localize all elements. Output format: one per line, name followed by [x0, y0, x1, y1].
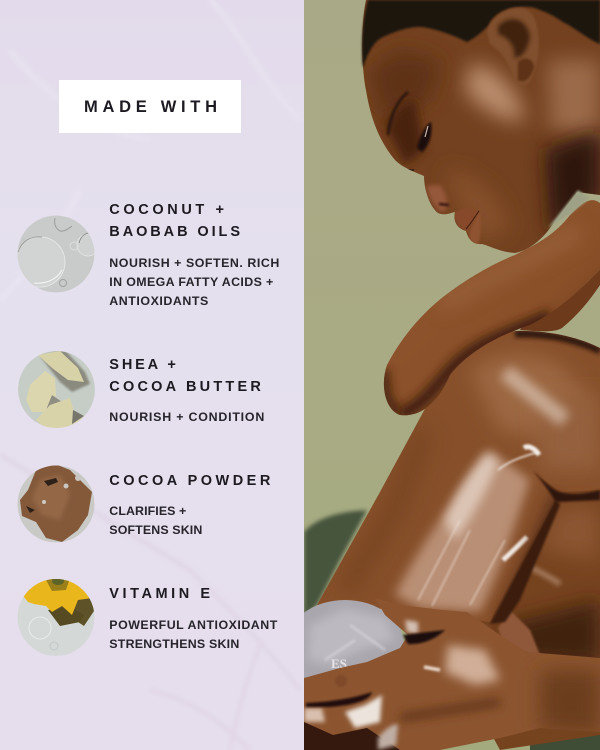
- dark area under hand: [304, 722, 400, 750]
- description: vitamin e: STRENGTHENS SKIN: [109, 637, 239, 651]
- icon: butter chunks: [18, 350, 95, 430]
- description: cocoa powder: CLARIFIES +: [109, 504, 186, 518]
- body: neck and face: [362, 0, 600, 253]
- description: cocoa powder: [109, 504, 202, 537]
- lower right background: [530, 735, 600, 750]
- foam between fingers: [378, 724, 398, 750]
- description: vitamin e: [109, 618, 278, 651]
- ingredient: vitamin e: [18, 577, 278, 656]
- heading: made with: [59, 80, 241, 133]
- gap beside shin: [490, 498, 560, 624]
- soap bar: [304, 600, 404, 678]
- title: coconut and baobab oils: COCONUT +: [109, 202, 224, 218]
- body: knee and shin: [317, 331, 600, 624]
- title: shea and cocoa butter: COCOA BUTTER: [109, 379, 261, 395]
- title: coconut and baobab oils: BAOBAB OILS: [109, 224, 240, 240]
- hand holding soap: [304, 598, 600, 750]
- title: shea and cocoa butter: [109, 357, 261, 395]
- lips: [455, 210, 472, 230]
- icon: sunflower and oil: [18, 577, 96, 656]
- title: cocoa powder: COCOA POWDER: [109, 473, 271, 489]
- icon: oil bubbles: [15, 216, 99, 292]
- description: cocoa powder: SOFTENS SKIN: [109, 523, 202, 537]
- heading: made with: MADE WITH: [84, 98, 217, 116]
- hair: [362, 0, 600, 68]
- ingredient: shea and cocoa butter: [18, 350, 264, 430]
- ear: [487, 8, 539, 85]
- description: shea and cocoa butter: NOURISH + CONDITION: [109, 410, 264, 424]
- description: vitamin e: POWERFUL ANTIOXIDANT: [109, 618, 278, 632]
- panel: ingredients background: [0, 0, 304, 750]
- body: thigh: [479, 472, 600, 750]
- title: coconut and baobab oils: [109, 202, 240, 240]
- ingredient: coconut and baobab oils: [15, 202, 279, 308]
- gap between lower fingers: [306, 692, 372, 707]
- description: coconut and baobab oils: NOURISH + SOFTEN. RICH: [109, 256, 279, 270]
- gap between fingers: [403, 630, 445, 644]
- description: coconut and baobab oils: ANTIOXIDANTS: [109, 294, 208, 308]
- body: back forearm: [520, 270, 600, 332]
- title: shea and cocoa butter: SHEA +: [109, 357, 176, 373]
- wall shadow: [304, 510, 367, 618]
- panel: photo of model applying soap: [286, 0, 600, 750]
- crease behind knee: [533, 470, 600, 502]
- description: coconut and baobab oils: [109, 256, 279, 308]
- soap bar: ES: [331, 656, 347, 671]
- icon: cocoa powder: [18, 464, 94, 542]
- eye: [417, 122, 432, 152]
- description: coconut and baobab oils: IN OMEGA FATTY ACIDS +: [109, 275, 273, 289]
- title: vitamin e: VITAMIN E: [109, 586, 210, 602]
- photo backdrop: [304, 0, 600, 750]
- ingredient: cocoa powder: [18, 464, 271, 542]
- eyebrow: [388, 92, 408, 135]
- nose: [426, 185, 447, 212]
- body: forearm resting on knee: [384, 190, 600, 415]
